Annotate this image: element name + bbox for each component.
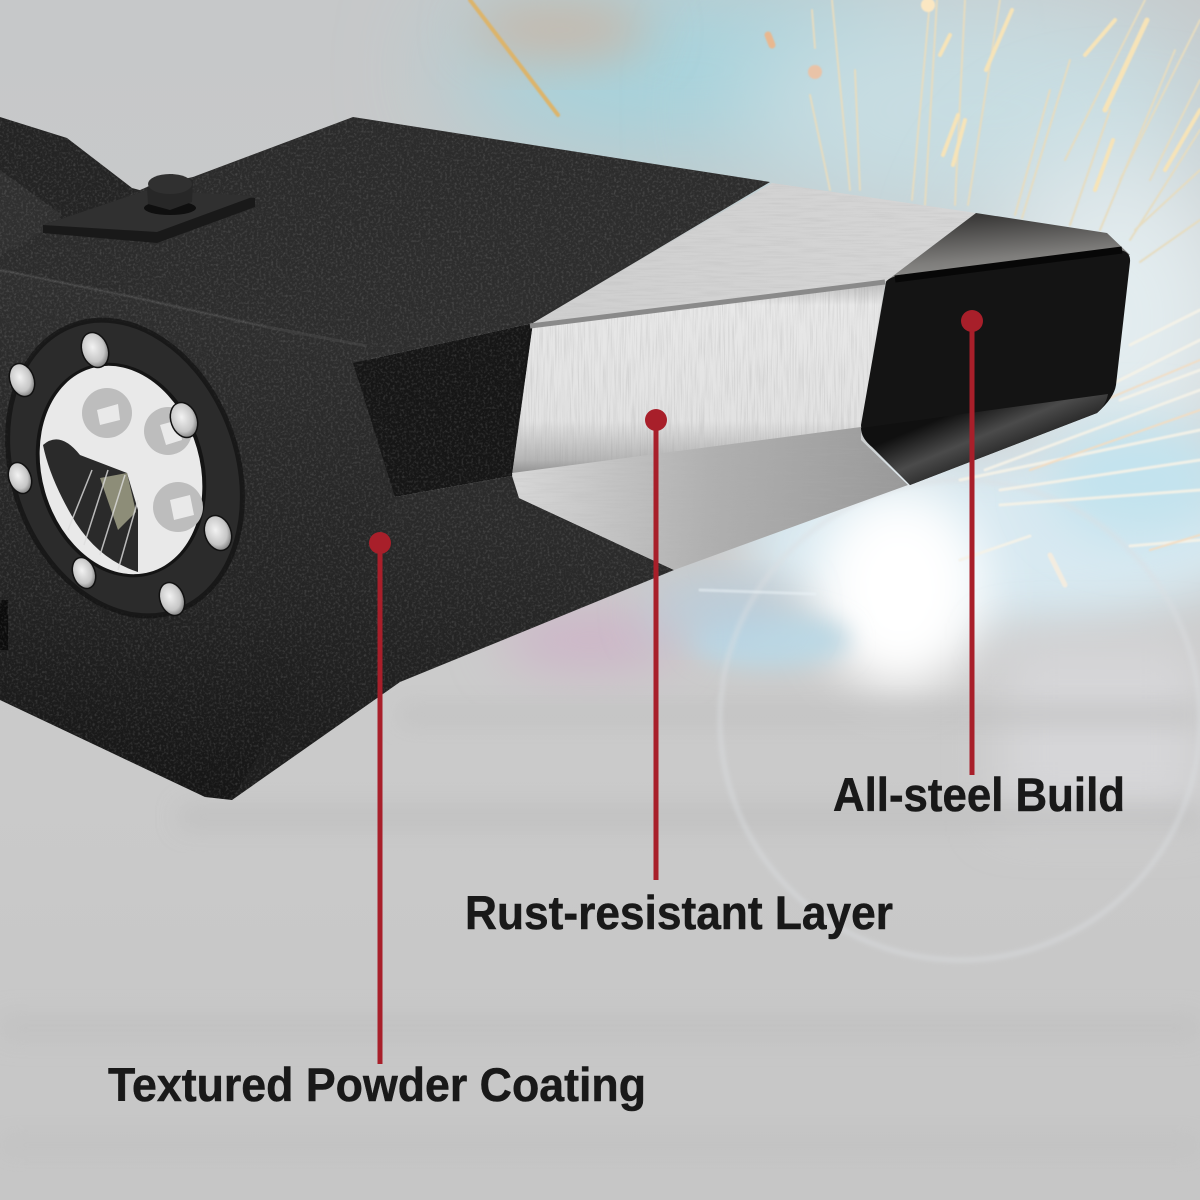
callout: rust-resistant layer (465, 409, 893, 939)
black steel end (861, 213, 1130, 485)
bumper product illustration (0, 117, 1130, 800)
bracket and bolt (43, 174, 255, 243)
callout: textured powder coating: Textured Powder Coating (108, 1058, 646, 1111)
silver rust-resistant section (381, 183, 1130, 570)
sparks (470, 0, 1200, 594)
callout: rust-resistant layer: Rust-resistant Layer (465, 886, 893, 939)
black textured body (0, 117, 770, 800)
callout: all-steel build: All-steel Build (833, 768, 1125, 821)
light housing (0, 287, 282, 649)
mount arm behind body (0, 117, 147, 270)
callout: all-steel build (833, 310, 1125, 821)
callout: textured powder coating (108, 532, 646, 1111)
